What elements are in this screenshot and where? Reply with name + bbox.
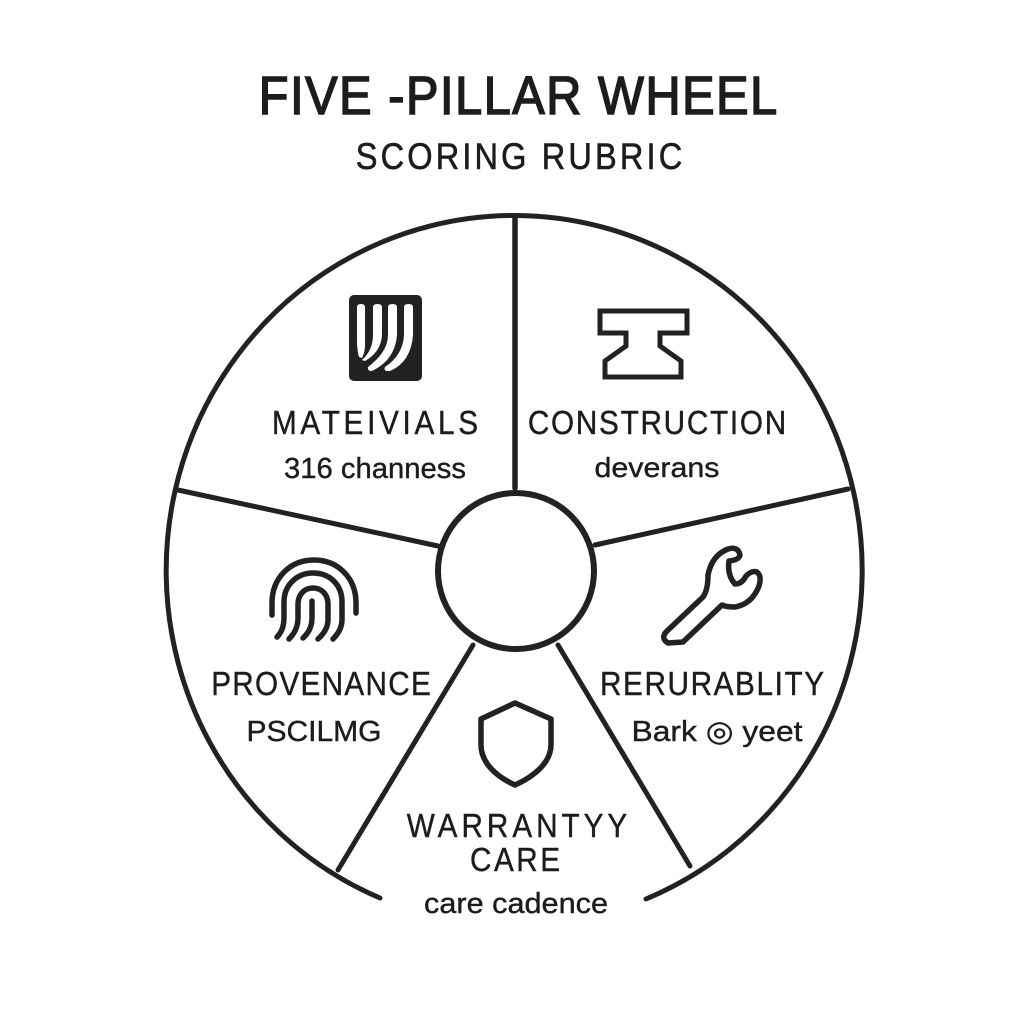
sublabel: warranty care: care cadence [424, 888, 608, 920]
panel: provenance [211, 560, 431, 748]
sublabel: provenance: PSCILMG [246, 716, 382, 748]
panel: construction [528, 311, 786, 483]
icon: fingerprint [272, 560, 356, 639]
panel: materials [272, 295, 478, 485]
subtitle: SCORING RUBRIC [356, 136, 682, 177]
spoke: lower left [338, 645, 473, 870]
wheel outer rim [166, 215, 862, 899]
label: warranty: WARRANTYY [407, 808, 627, 844]
title: FIVE -PILLAR WHEEL [259, 65, 777, 126]
icon: wrench [664, 548, 760, 643]
label: care: CARE [470, 842, 560, 878]
icon: anvil [600, 311, 687, 377]
sublabel: materials: 316 channess [284, 453, 466, 485]
label: construction: CONSTRUCTION [528, 405, 786, 441]
label: repairability: RERURABLITY [600, 666, 824, 702]
panel: repairability [600, 548, 824, 748]
spoke: lower right [558, 645, 690, 866]
wheel [166, 215, 862, 899]
sublabel: repairability: Bark ◎ yeet [632, 716, 802, 748]
hub [438, 493, 594, 649]
icon: material grain [349, 295, 422, 381]
spoke: right [595, 489, 848, 545]
spoke: top [512, 218, 518, 488]
icon: shield [481, 703, 551, 785]
spoke: left [178, 490, 438, 546]
label: materials: MATEIVIALS [272, 405, 478, 441]
label: provenance: PROVENANCE [211, 666, 431, 702]
panel: warranty care [407, 703, 627, 920]
sublabel: construction: deverans [594, 452, 720, 483]
